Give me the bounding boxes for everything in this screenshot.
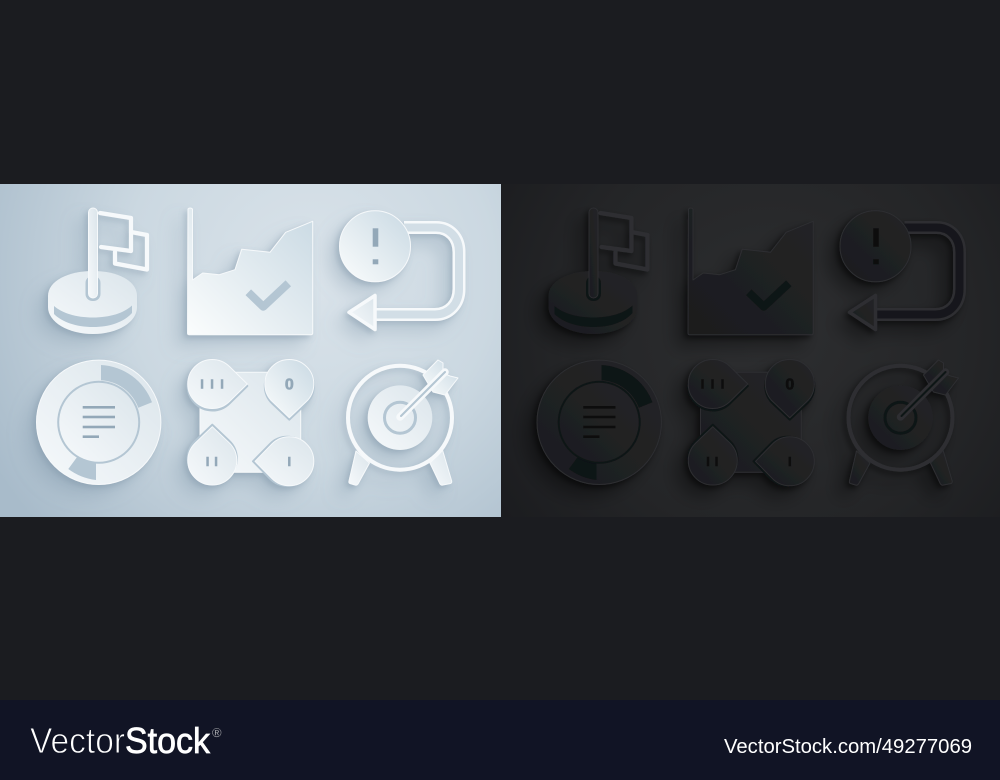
panel: dark icon set — [502, 184, 1000, 517]
image id: VectorStock.com/49277069 — [724, 735, 972, 758]
icon: target with arrow — [348, 360, 458, 485]
light panel background — [0, 184, 501, 517]
label: 0 (dark): 0 — [785, 377, 794, 394]
panel: light icon set — [0, 184, 501, 517]
icon: area chart with check mark — [188, 208, 313, 335]
icon: alert with return arrow (dark) — [840, 211, 960, 330]
registered mark: ® — [212, 725, 222, 740]
logo word: Vector: Vector — [30, 720, 125, 761]
icon: donut chart with text lines — [36, 360, 161, 484]
logo word: Stock: Stock — [125, 720, 211, 761]
label: I: I — [287, 454, 291, 469]
dark panel background — [502, 184, 1000, 517]
icon: alert with return arrow — [340, 211, 459, 330]
footer band — [0, 700, 1000, 780]
icon: donut chart with text lines (dark) — [537, 360, 661, 484]
label: III: III — [200, 376, 224, 392]
icon: four numbered map pins on square (dark) — [688, 359, 814, 486]
icon: target with arrow (dark) — [848, 360, 958, 485]
label: II (dark): II — [706, 454, 718, 469]
icon: four numbered map pins on square — [188, 359, 314, 486]
icon: area chart with check mark (dark) — [688, 208, 813, 335]
label: III (dark): III — [701, 376, 724, 392]
icon: flag on disc (dark) — [548, 208, 648, 334]
icon: flag on disc — [48, 208, 147, 334]
label: 0: 0 — [285, 377, 294, 394]
label: I (dark): I — [788, 454, 792, 469]
label: II: II — [206, 454, 218, 469]
